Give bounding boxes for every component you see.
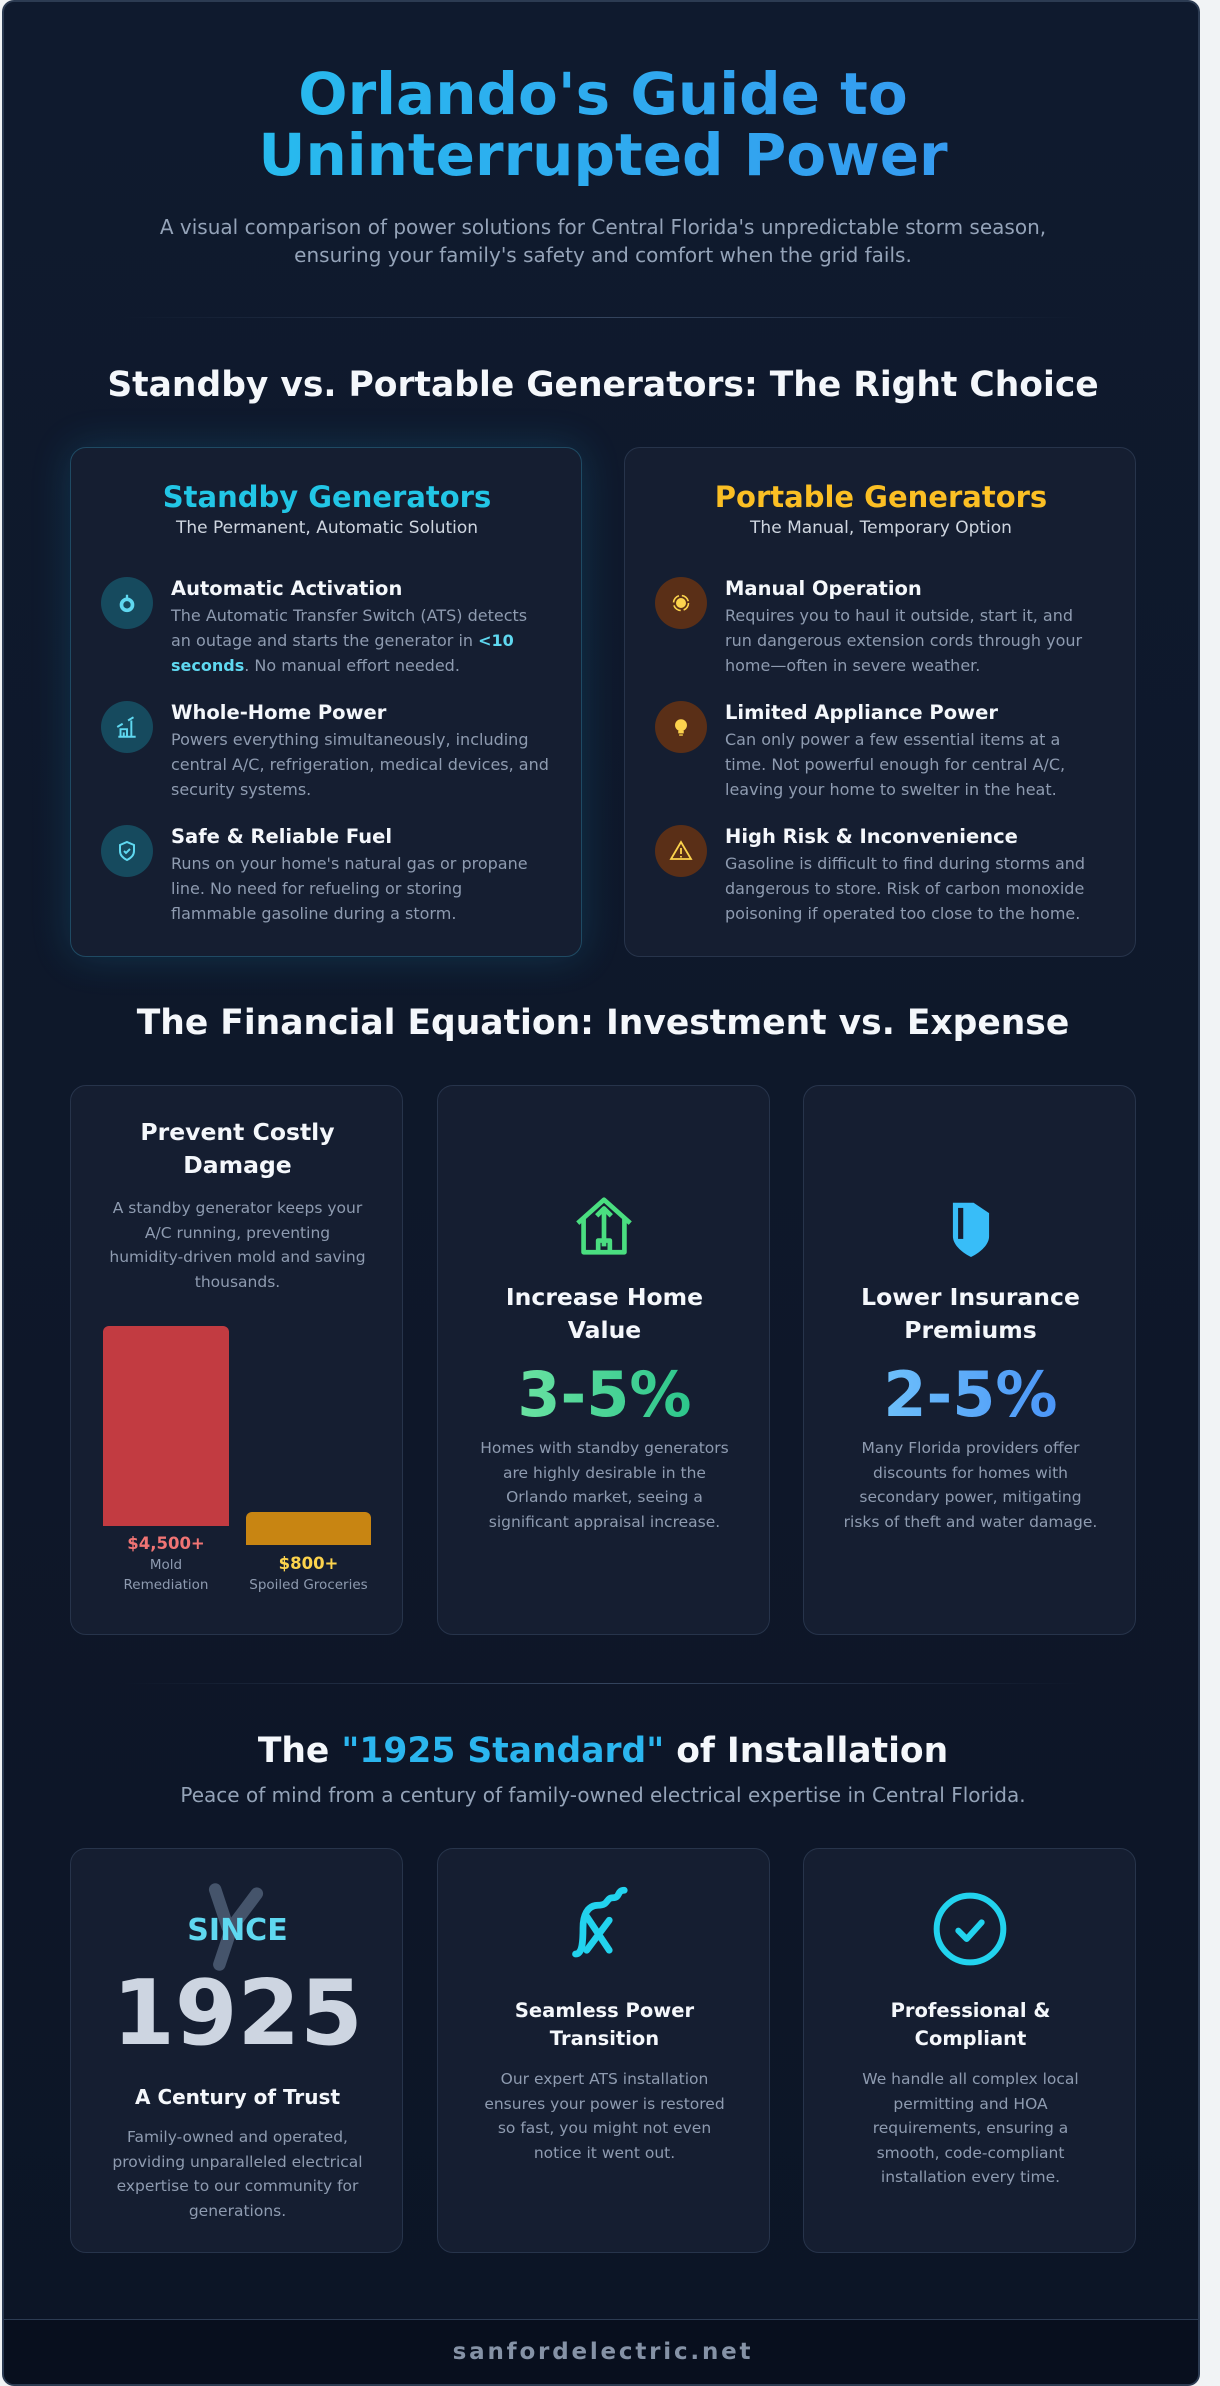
panel: home value: Homes with standby generators — [480, 1439, 729, 1457]
item: whole-home power: central A/C, refrigeration, medical devices, and — [171, 755, 549, 774]
panel: since 1925 — [70, 1848, 403, 2253]
portable heading: Portable Generators — [715, 480, 1047, 514]
footer: sanfordelectric.net — [453, 2339, 753, 2365]
panel: since 1925: 1925 — [112, 1961, 363, 2066]
panel: since 1925: providing unparalleled electrical — [112, 2152, 363, 2170]
panel: portable generators — [624, 447, 1136, 957]
item: automatic activation: The Automatic Transfer Switch (ATS) detects — [171, 606, 527, 625]
item: automatic activation: seconds. No manual effort needed. — [171, 656, 460, 675]
icon: shield doc — [952, 1202, 990, 1257]
bar chart: Mold — [150, 1557, 182, 1573]
title: Uninterrupted Power — [258, 121, 948, 189]
panel: seamless transition — [437, 1848, 770, 2253]
item: manual operation: Manual Operation — [725, 577, 922, 600]
bar chart: Remediation — [124, 1577, 208, 1593]
panel: professional & compliant: smooth, code-compliant — [877, 2144, 1064, 2162]
panel: professional & compliant: installation every time. — [881, 2168, 1060, 2186]
panel: home value: Value — [568, 1316, 641, 1344]
item: high risk: dangerous to store. Risk of carbon monoxide — [725, 879, 1084, 898]
bar: groceries — [246, 1512, 371, 1545]
item: automatic activation: Automatic Activation — [171, 577, 402, 600]
subtitle: A visual comparison of power solutions for Central Florida's unpredictable storm season, — [160, 215, 1046, 239]
item: safe fuel — [101, 825, 528, 923]
heading: financial equation: The Financial Equation: Investment vs. Expense — [137, 1003, 1069, 1043]
item: safe fuel: Runs on your home's natural gas or propane — [171, 854, 528, 873]
panel: professional & compliant — [803, 1848, 1136, 2253]
panel: seamless transition: notice it went out. — [534, 2144, 675, 2162]
damage title — [140, 1118, 335, 1179]
item: manual operation: Requires you to haul it outside, start it, and — [725, 606, 1073, 625]
item: limited power: leaving your home to swelter in the heat. — [725, 780, 1057, 799]
panel: seamless transition: Seamless Power — [515, 1999, 694, 2022]
bar chart: $800+ — [279, 1554, 338, 1573]
damage text — [109, 1199, 366, 1290]
panel: home value: are highly desirable in the — [503, 1464, 706, 1482]
standby heading — [163, 480, 491, 538]
subtitle — [160, 215, 1046, 267]
panel: insurance: risks of theft and water damage. — [844, 1512, 1097, 1530]
bar chart — [103, 1326, 371, 1593]
panel: home value — [437, 1085, 770, 1635]
title — [4, 64, 1202, 186]
damage title: Damage — [183, 1151, 292, 1179]
item: limited power: Limited Appliance Power — [725, 701, 998, 724]
panel: home value: significant appraisal increase. — [489, 1512, 720, 1530]
panel: since 1925: generations. — [189, 2202, 286, 2220]
panel: insurance: secondary power, mitigating — [859, 1488, 1082, 1506]
section subtitle: Peace of mind from a century of family-owned electrical expertise in Central Florida. — [180, 1783, 1026, 1807]
item: manual operation — [655, 577, 1082, 675]
panel: insurance: Premiums — [904, 1316, 1037, 1344]
panel: professional & compliant: Compliant — [915, 2027, 1026, 2050]
icon: house — [101, 701, 153, 753]
panel: professional & compliant: requirements, ensuring a — [873, 2119, 1068, 2137]
icon: home — [576, 1197, 632, 1255]
item: automatic activation — [101, 577, 527, 675]
panel: standby generators — [70, 447, 582, 957]
panel: insurance: Many Florida providers offer — [861, 1439, 1080, 1457]
item: whole-home power: Whole-Home Power — [171, 701, 386, 724]
icon: power — [101, 577, 153, 629]
standby heading: The Permanent, Automatic Solution — [176, 518, 478, 538]
panel: seamless transition: ensures your power is restored — [484, 2094, 725, 2112]
panel: seamless transition: Our expert ATS installation — [501, 2070, 708, 2088]
subtitle: ensuring your family's safety and comfort when the grid fails. — [294, 243, 912, 267]
bar: mold — [103, 1326, 229, 1526]
item: high risk: High Risk & Inconvenience — [725, 825, 1018, 848]
damage text: A/C running, preventing — [145, 1224, 330, 1242]
panel: since 1925: expertise to our community for — [117, 2177, 358, 2195]
item: whole-home power — [101, 701, 549, 799]
standby heading: Standby Generators — [163, 480, 491, 514]
item: whole-home power: security systems. — [171, 780, 311, 799]
item: safe fuel: flammable gasoline during a storm. — [171, 904, 456, 923]
panel: insurance: discounts for homes with — [873, 1464, 1068, 1482]
icon: transition — [572, 1886, 628, 1958]
item: manual operation: home—often in severe weather. — [725, 656, 980, 675]
item: limited power: Can only power a few essential items at a — [725, 730, 1060, 749]
panel: seamless transition: so fast, you might not even — [498, 2119, 711, 2137]
title: Orlando's Guide to — [298, 60, 908, 128]
panel: prevent costly damage — [70, 1085, 403, 1635]
portable heading — [715, 480, 1047, 538]
portable heading: The Manual, Temporary Option — [750, 518, 1012, 538]
item: manual operation: run dangerous extension cords through your — [725, 631, 1082, 650]
item: whole-home power: Powers everything simultaneously, including — [171, 730, 528, 749]
item: safe fuel: Safe & Reliable Fuel — [171, 825, 392, 848]
heading: standby vs portable: Standby vs. Portable Generators: The Right Choice — [107, 365, 1099, 405]
item: high risk — [655, 825, 1085, 923]
item: limited power — [655, 701, 1065, 799]
item: automatic activation: an outage and starts the generator in <10 — [171, 631, 514, 650]
icon: warning — [655, 825, 707, 877]
stat: 2-5% — [804, 1358, 1137, 1431]
item: limited power: time. Not powerful enough for central A/C, — [725, 755, 1065, 774]
damage text: A standby generator keeps your — [113, 1199, 362, 1217]
damage text: thousands. — [195, 1272, 280, 1290]
panel: since 1925: Family-owned and operated, — [127, 2128, 348, 2146]
damage title: Prevent Costly — [140, 1118, 335, 1146]
icon: gear — [655, 577, 707, 629]
panel: insurance — [803, 1085, 1136, 1635]
panel: professional & compliant: Professional & — [891, 1999, 1050, 2022]
panel: professional & compliant: permitting and HOA — [893, 2094, 1048, 2112]
panel: seamless transition: Transition — [550, 2027, 659, 2050]
item: high risk: poisoning if operated too close to the home. — [725, 904, 1080, 923]
icon: bulb — [655, 701, 707, 753]
panel: professional & compliant: We handle all complex local — [862, 2070, 1079, 2088]
damage text: humidity-driven mold and saving — [109, 1248, 366, 1266]
panel: since 1925: A Century of Trust — [135, 2085, 340, 2109]
bar chart: Spoiled Groceries — [249, 1577, 368, 1593]
panel: home value: Orlando market, seeing a — [506, 1488, 703, 1506]
icon: tools watermark — [208, 1883, 263, 1971]
stat: 3-5% — [438, 1358, 771, 1431]
footer — [4, 2319, 1202, 2386]
panel: insurance: Lower Insurance — [861, 1283, 1080, 1311]
icon: shield — [101, 825, 153, 877]
heading: 1925 standard: The "1925 Standard" of Installation — [258, 1731, 948, 1771]
stat: 3-5%: 3-5% — [517, 1358, 692, 1431]
icon: check circle — [934, 1892, 1006, 1966]
item: high risk: Gasoline is difficult to find during storms and — [725, 854, 1085, 873]
bar chart: $4,500+ — [127, 1534, 205, 1553]
panel: home value: Increase Home — [506, 1283, 703, 1311]
panel: since 1925: SINCE — [187, 1913, 288, 1948]
item: safe fuel: line. No need for refueling or storing — [171, 879, 462, 898]
stat: 2-5%: 2-5% — [883, 1358, 1058, 1431]
